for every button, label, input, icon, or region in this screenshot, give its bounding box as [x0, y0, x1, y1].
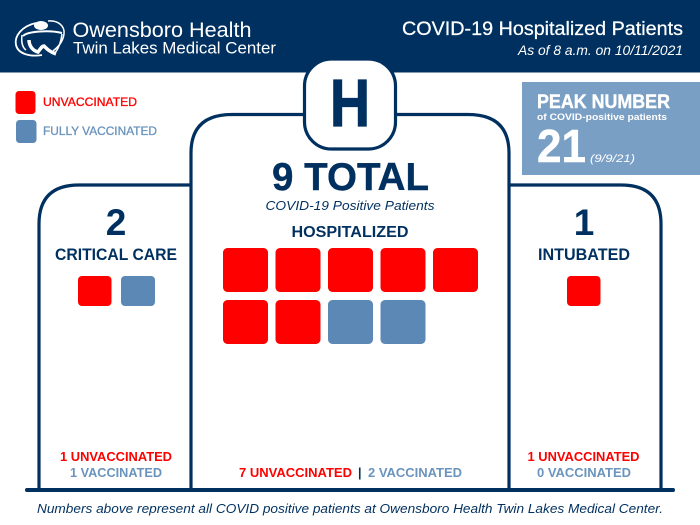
- callout: peak number: 21: [537, 120, 586, 172]
- total count: 9 TOTAL: [272, 156, 429, 199]
- logo icon: [16, 21, 64, 56]
- logo wordmark: [72, 18, 277, 58]
- critical care breakdown: 1 VACCINATED: [70, 466, 162, 480]
- critical care breakdown: [60, 450, 172, 480]
- critical care count: 2: [106, 202, 126, 243]
- intubated square: [567, 276, 600, 306]
- hospital H icon: H: [330, 66, 370, 141]
- header date: As of 8 a.m. on 10/11/2021: [517, 43, 683, 58]
- intubated breakdown: 1 UNVACCINATED: [528, 450, 640, 464]
- critical care squares: [78, 276, 155, 306]
- panel: critical care: [39, 185, 191, 490]
- intubated heading: INTUBATED: [538, 245, 630, 264]
- legend: fully vaccinated: [16, 120, 157, 143]
- hospitalized heading: HOSPITALIZED: [292, 224, 408, 241]
- critical care heading: CRITICAL CARE: [55, 245, 177, 264]
- legend: unvaccinated: UNVACCINATED: [43, 97, 137, 109]
- footnote: Numbers above represent all COVID positive patients at Owensboro Health Twin Lakes Medical Center.: [37, 501, 663, 516]
- callout: peak number: [522, 82, 700, 175]
- baseline: [25, 488, 675, 492]
- hospitalized squares: [223, 248, 478, 344]
- legend: fully vaccinated: FULLY VACCINATED: [43, 126, 157, 138]
- hospitalized breakdown: [239, 466, 462, 480]
- panel: intubated: [509, 185, 661, 490]
- header banner: [0, 0, 700, 72]
- intubated breakdown: 0 VACCINATED: [537, 466, 631, 480]
- intubated count: 1: [574, 202, 594, 243]
- logo wordmark: Twin Lakes Medical Center: [73, 40, 277, 58]
- critical care breakdown: 1 UNVACCINATED: [60, 450, 172, 464]
- callout: peak number: of COVID-positive patients: [537, 112, 667, 123]
- legend: [16, 91, 157, 143]
- hospitalized breakdown: |: [358, 466, 362, 480]
- hospital H icon: [304, 59, 396, 149]
- logo wordmark: Owensboro Health: [72, 18, 252, 42]
- legend: unvaccinated: [16, 91, 137, 114]
- hospitalized breakdown: 7 UNVACCINATED: [239, 466, 352, 480]
- callout: peak number: PEAK NUMBER: [537, 91, 670, 113]
- intubated breakdown: [528, 450, 640, 480]
- hospitalized breakdown: 2 VACCINATED: [368, 466, 462, 480]
- panel: hospitalized: [191, 59, 509, 490]
- header title: COVID-19 Hospitalized Patients: [402, 18, 683, 40]
- callout: peak number: (9/9/21): [590, 153, 635, 165]
- total subtitle: COVID-19 Positive Patients: [266, 199, 434, 213]
